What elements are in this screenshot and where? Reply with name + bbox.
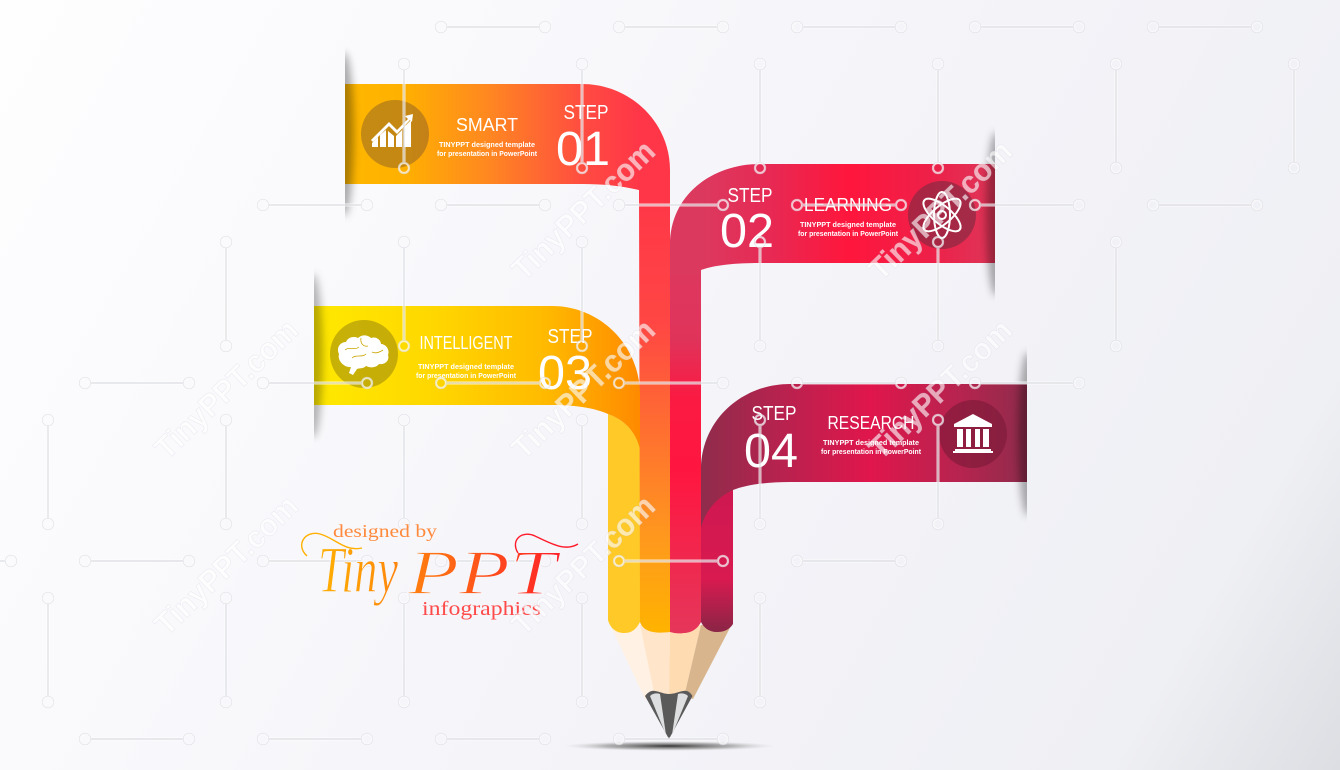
step 4 band bbox=[701, 352, 1038, 528]
step 4 label: for presentation in PowerPoint bbox=[821, 447, 921, 456]
step 1 label: SMART bbox=[456, 115, 518, 135]
step 1 label bbox=[437, 102, 610, 176]
ground shadow bbox=[563, 741, 775, 751]
step 4 label bbox=[744, 403, 921, 478]
step 3 label: STEP bbox=[548, 326, 592, 348]
icon: bank building bbox=[953, 414, 993, 453]
logo: designed by TinyPPT infographics: Tiny bbox=[318, 534, 398, 607]
band end shadow bbox=[314, 272, 328, 440]
column 3 pink bbox=[670, 240, 701, 633]
step 1 label: STEP bbox=[564, 102, 608, 124]
icon circle: chart bbox=[361, 100, 429, 168]
icon circle: atom bbox=[908, 181, 976, 249]
step 1 label: TINYPPT designed template bbox=[439, 140, 535, 149]
band end shadow bbox=[345, 50, 359, 218]
pencil lead bbox=[645, 691, 692, 739]
step 4 label: 04 bbox=[744, 425, 798, 478]
step 1 band bbox=[334, 52, 670, 216]
logo: designed by TinyPPT infographics: infographics bbox=[422, 598, 541, 620]
step 4 label: STEP bbox=[752, 403, 796, 425]
watermarks: TinyPPT.com bbox=[862, 133, 1019, 287]
step 4 label: RESEARCH bbox=[828, 413, 914, 433]
pencil wood tip bbox=[608, 620, 733, 699]
icon: atom bbox=[919, 192, 965, 238]
step 2 band bbox=[670, 132, 1006, 296]
icon circle: bank bbox=[939, 400, 1007, 468]
step 3 label: 03 bbox=[538, 347, 592, 400]
pencil bbox=[608, 190, 733, 739]
step 2 label: for presentation in PowerPoint bbox=[798, 229, 898, 238]
icon circle: brain bbox=[330, 320, 398, 388]
step 1 label: for presentation in PowerPoint bbox=[437, 149, 537, 158]
logo: designed by TinyPPT infographics: PPT bbox=[407, 537, 562, 608]
step 2 label: 02 bbox=[720, 205, 774, 258]
step 2 label: TINYPPT designed template bbox=[800, 220, 896, 229]
watermarks: TinyPPT.com bbox=[148, 488, 305, 642]
step 3 band bbox=[303, 274, 640, 450]
step 2 label: STEP bbox=[728, 185, 772, 207]
band end shadow bbox=[1014, 350, 1027, 518]
step 2 label: LEARNING bbox=[804, 195, 892, 215]
logo: designed by TinyPPT infographics: designed by bbox=[333, 521, 437, 541]
step 2 label bbox=[720, 185, 898, 258]
icon: rising chart bbox=[371, 114, 413, 147]
watermarks: TinyPPT.com bbox=[505, 488, 662, 642]
column 2 orange bbox=[639, 190, 670, 633]
watermarks: TinyPPT.com bbox=[148, 312, 305, 466]
step 3 label: TINYPPT designed template bbox=[418, 362, 514, 371]
logo: designed by TinyPPT infographics bbox=[302, 521, 578, 620]
band end shadow bbox=[982, 130, 995, 298]
watermarks: TinyPPT.com bbox=[505, 312, 662, 466]
column 4 crimson bbox=[701, 470, 733, 632]
step 1 label: 01 bbox=[556, 123, 610, 176]
watermarks: TinyPPT.com bbox=[862, 312, 1019, 466]
step 4 label: TINYPPT designed template bbox=[823, 438, 919, 447]
watermarks: TinyPPT.com bbox=[505, 133, 662, 287]
watermarks bbox=[148, 133, 1019, 642]
icon: brain bbox=[338, 335, 389, 375]
step 3 label: for presentation in PowerPoint bbox=[416, 371, 516, 380]
step 3 label: INTELLIGENT bbox=[420, 333, 512, 353]
column 1 yellow bbox=[608, 414, 640, 633]
step 3 label bbox=[416, 326, 592, 400]
